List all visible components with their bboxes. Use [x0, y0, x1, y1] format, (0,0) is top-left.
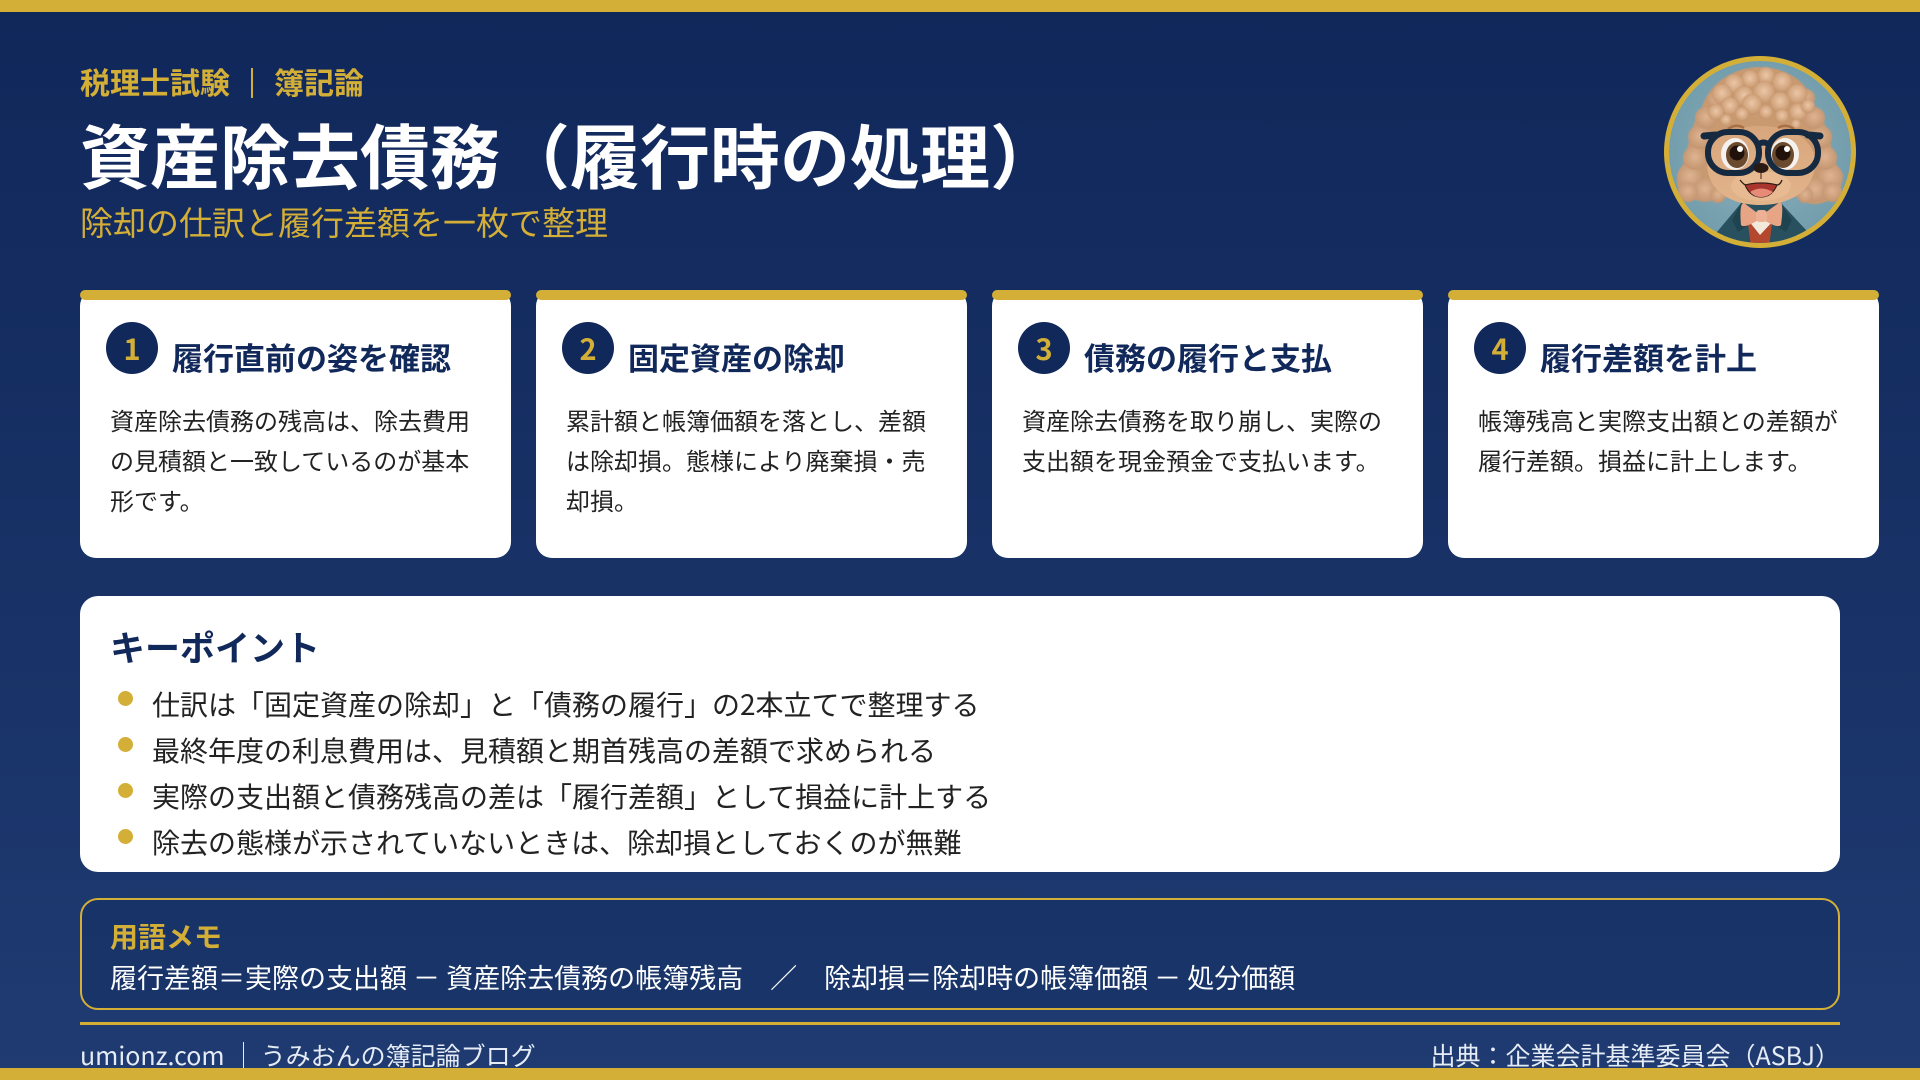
- card 1 number: [106, 322, 158, 374]
- card 4 top accent: [1448, 290, 1878, 300]
- card 4 number: 4: [1491, 327, 1509, 369]
- card 3 body: 資産除去債務を取り崩し、実際の: [1022, 402, 1382, 437]
- bullet 4: [118, 829, 133, 844]
- card 1 heading: 履行直前の姿を確認: [172, 334, 451, 379]
- card 3 heading: 債務の履行と支払: [1084, 334, 1332, 379]
- card 1 number: 1: [123, 327, 141, 369]
- card 2 body: [566, 402, 926, 517]
- card 2 top accent: [536, 290, 966, 300]
- card 1: [80, 290, 510, 558]
- subtitle: 除却の仕訳と履行差額を一枚で整理: [80, 197, 608, 245]
- card 1 body: の見積額と一致しているのが基本: [110, 442, 469, 477]
- card 3 number: 3: [1035, 327, 1053, 369]
- card 2 body: 却損。: [566, 482, 638, 517]
- point 2: 最終年度の利息費用は、見積額と期首残高の差額で求められる: [152, 730, 936, 770]
- card 4 heading: 履行差額を計上: [1540, 334, 1757, 379]
- point 3: 実際の支出額と債務残高の差は「履行差額」として損益に計上する: [152, 776, 991, 816]
- memo label: 用語メモ: [110, 916, 222, 956]
- footer source: 出典：企業会計基準委員会（ASBJ）: [1431, 1037, 1840, 1073]
- card 4 body: 帳簿残高と実際支出額との差額が: [1478, 402, 1838, 437]
- bullet 2: [118, 737, 133, 752]
- point 1: 仕訳は「固定資産の除却」と「債務の履行」の2本立てで整理する: [152, 684, 980, 724]
- bottom gold bar: [0, 1068, 1920, 1080]
- point 4: 除去の態様が示されていないときは、除却損としておくのが無難: [152, 822, 961, 862]
- card 1 top accent: [80, 290, 510, 300]
- card 3 body: [1022, 402, 1382, 477]
- card 2: [536, 290, 966, 558]
- key points heading: キーポイント: [110, 621, 320, 672]
- panel: key points: [80, 596, 1840, 872]
- header eyebrow: 税理士試験 簿記論: [80, 59, 364, 103]
- card 3 number: [1018, 322, 1070, 374]
- memo text: 履行差額＝実際の支出額 － 資産除去債務の帳簿残高 ／ 除却損＝除却時の帳簿価額 － 処分価額: [110, 957, 1295, 996]
- title: 資産除去債務（履行時の処理）: [80, 103, 1060, 204]
- panel: glossary memo: [80, 898, 1840, 1010]
- card 4 body: 履行差額。損益に計上します。: [1478, 442, 1812, 477]
- card 3 body: 支出額を現金預金で支払います。: [1022, 442, 1380, 477]
- card 1 body: 形です。: [110, 482, 204, 517]
- card 3 top accent: [992, 290, 1422, 300]
- footer rule: [80, 1022, 1840, 1025]
- icon: poodle avatar: [1664, 56, 1856, 248]
- card 1 body: [110, 402, 470, 517]
- bullet 1: [118, 691, 133, 706]
- card 4 number: [1474, 322, 1526, 374]
- card 2 number: 2: [579, 327, 597, 369]
- footer left text: umionz.com うみおんの簿記論ブログ: [80, 1037, 536, 1073]
- card 1 body: 資産除去債務の残高は、除去費用: [110, 402, 470, 437]
- card 2 body: 累計額と帳簿価額を落とし、差額: [566, 402, 926, 437]
- bullet 3: [118, 783, 133, 798]
- card 2 heading: 固定資産の除却: [628, 334, 845, 379]
- card 4: [1448, 290, 1878, 558]
- card 3: [992, 290, 1422, 558]
- card 2 body: は除却損。態様により廃棄損・売: [566, 442, 926, 477]
- card 4 body: [1478, 402, 1838, 477]
- top gold bar: [0, 0, 1920, 12]
- card 2 number: [562, 322, 614, 374]
